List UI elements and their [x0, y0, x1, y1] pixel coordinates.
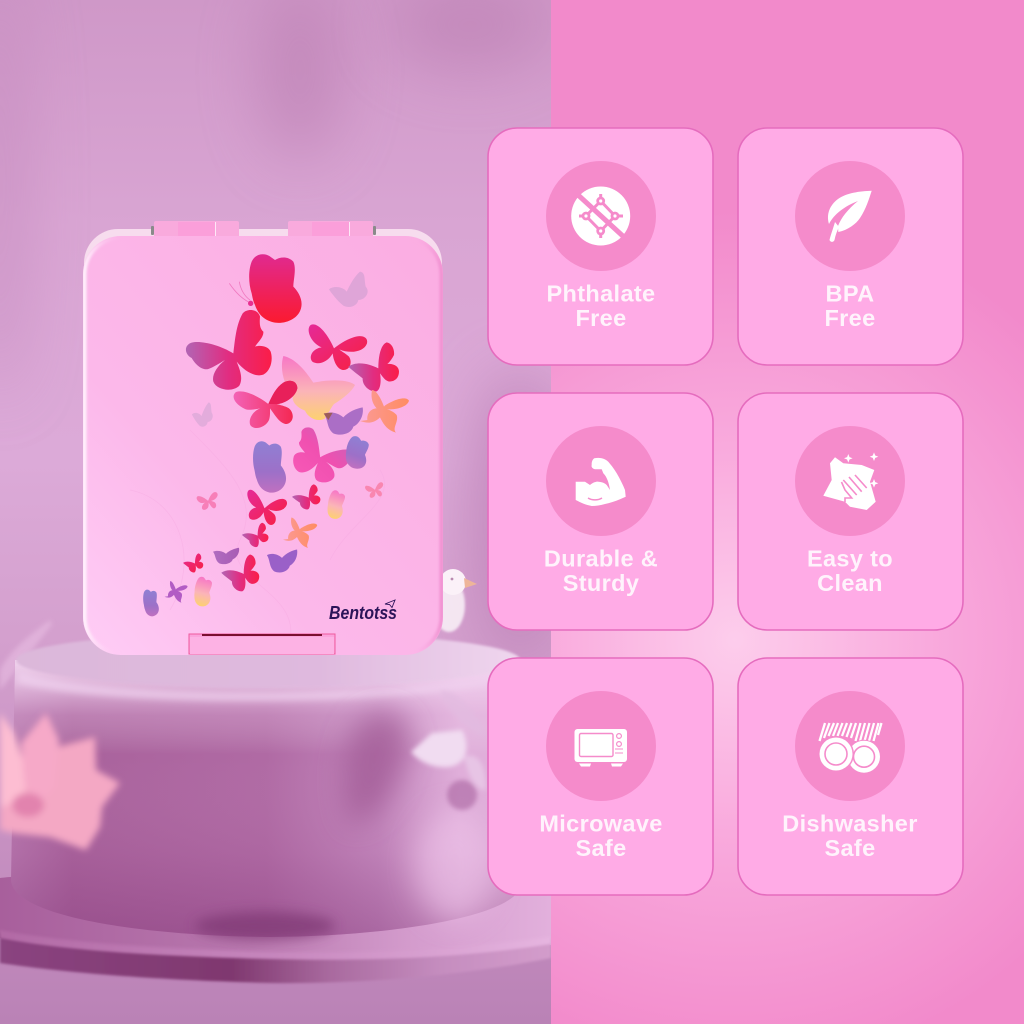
- card background: [488, 393, 713, 630]
- panel: right pink background: [551, 0, 1024, 1024]
- label second line: Safe: [824, 835, 876, 861]
- icon badge circle: [795, 161, 905, 271]
- icon: hand wiping with cloth: [823, 452, 878, 510]
- label second line: Clean: [817, 570, 883, 596]
- card background: [738, 393, 963, 630]
- blurred background leaves: [0, 622, 50, 686]
- bird figurine: [441, 569, 477, 634]
- label: Phthalate: [547, 280, 655, 306]
- icon badge circle: [546, 426, 656, 536]
- feature card: Durable & Sturdy: [488, 393, 713, 630]
- pedestal: cake tier: [11, 632, 521, 940]
- flower: pink blurred lotus: [0, 713, 120, 850]
- lid rim highlight: [84, 238, 442, 654]
- feature card: Microwave Safe: [488, 658, 713, 895]
- lunch box hinges: [151, 221, 376, 240]
- icon: dishwasher plates: [818, 723, 882, 774]
- icon: phthalate molecule crossed out: [571, 186, 630, 246]
- pedestal: lower base plate: [0, 872, 551, 983]
- feature card: Phthalate Free: [488, 128, 713, 365]
- lunch box base edge: [84, 229, 442, 299]
- label second line: Free: [824, 305, 876, 331]
- product: butterfly lunch box: [83, 221, 443, 655]
- feature card: Easy to Clean: [738, 393, 963, 630]
- icon badge circle: [795, 426, 905, 536]
- card background: [488, 658, 713, 895]
- feature card: BPA Free: [738, 128, 963, 365]
- card background: [488, 128, 713, 365]
- icon: flexed arm: [576, 458, 626, 506]
- icon: leaf: [828, 191, 872, 242]
- lunch box clasp: [189, 634, 335, 654]
- feature card: Dishwasher Safe: [738, 658, 963, 895]
- icon: microwave: [574, 729, 627, 766]
- card background: [738, 128, 963, 365]
- upper cluster drawn at 1/3 scale from detail coordinates: [186, 254, 409, 435]
- label: Microwave: [539, 810, 663, 836]
- lunch box lid: [83, 236, 443, 655]
- label second line: Sturdy: [563, 570, 639, 596]
- icon badge circle: [546, 691, 656, 801]
- brand logo: Bentotss: [329, 603, 397, 623]
- butterfly illustration: [143, 254, 409, 616]
- faint line trails: [130, 430, 385, 640]
- card background: [738, 658, 963, 895]
- label: Easy to: [807, 546, 893, 572]
- panel: left photo background: [0, 0, 570, 1024]
- label: Durable &: [544, 546, 658, 572]
- flower: pale right flower: [410, 728, 486, 812]
- icon badge circle: [546, 161, 656, 271]
- label: Dishwasher: [782, 810, 918, 836]
- label second line: Safe: [575, 835, 627, 861]
- label second line: Free: [575, 305, 627, 331]
- icon badge circle: [795, 691, 905, 801]
- label: BPA: [826, 280, 874, 306]
